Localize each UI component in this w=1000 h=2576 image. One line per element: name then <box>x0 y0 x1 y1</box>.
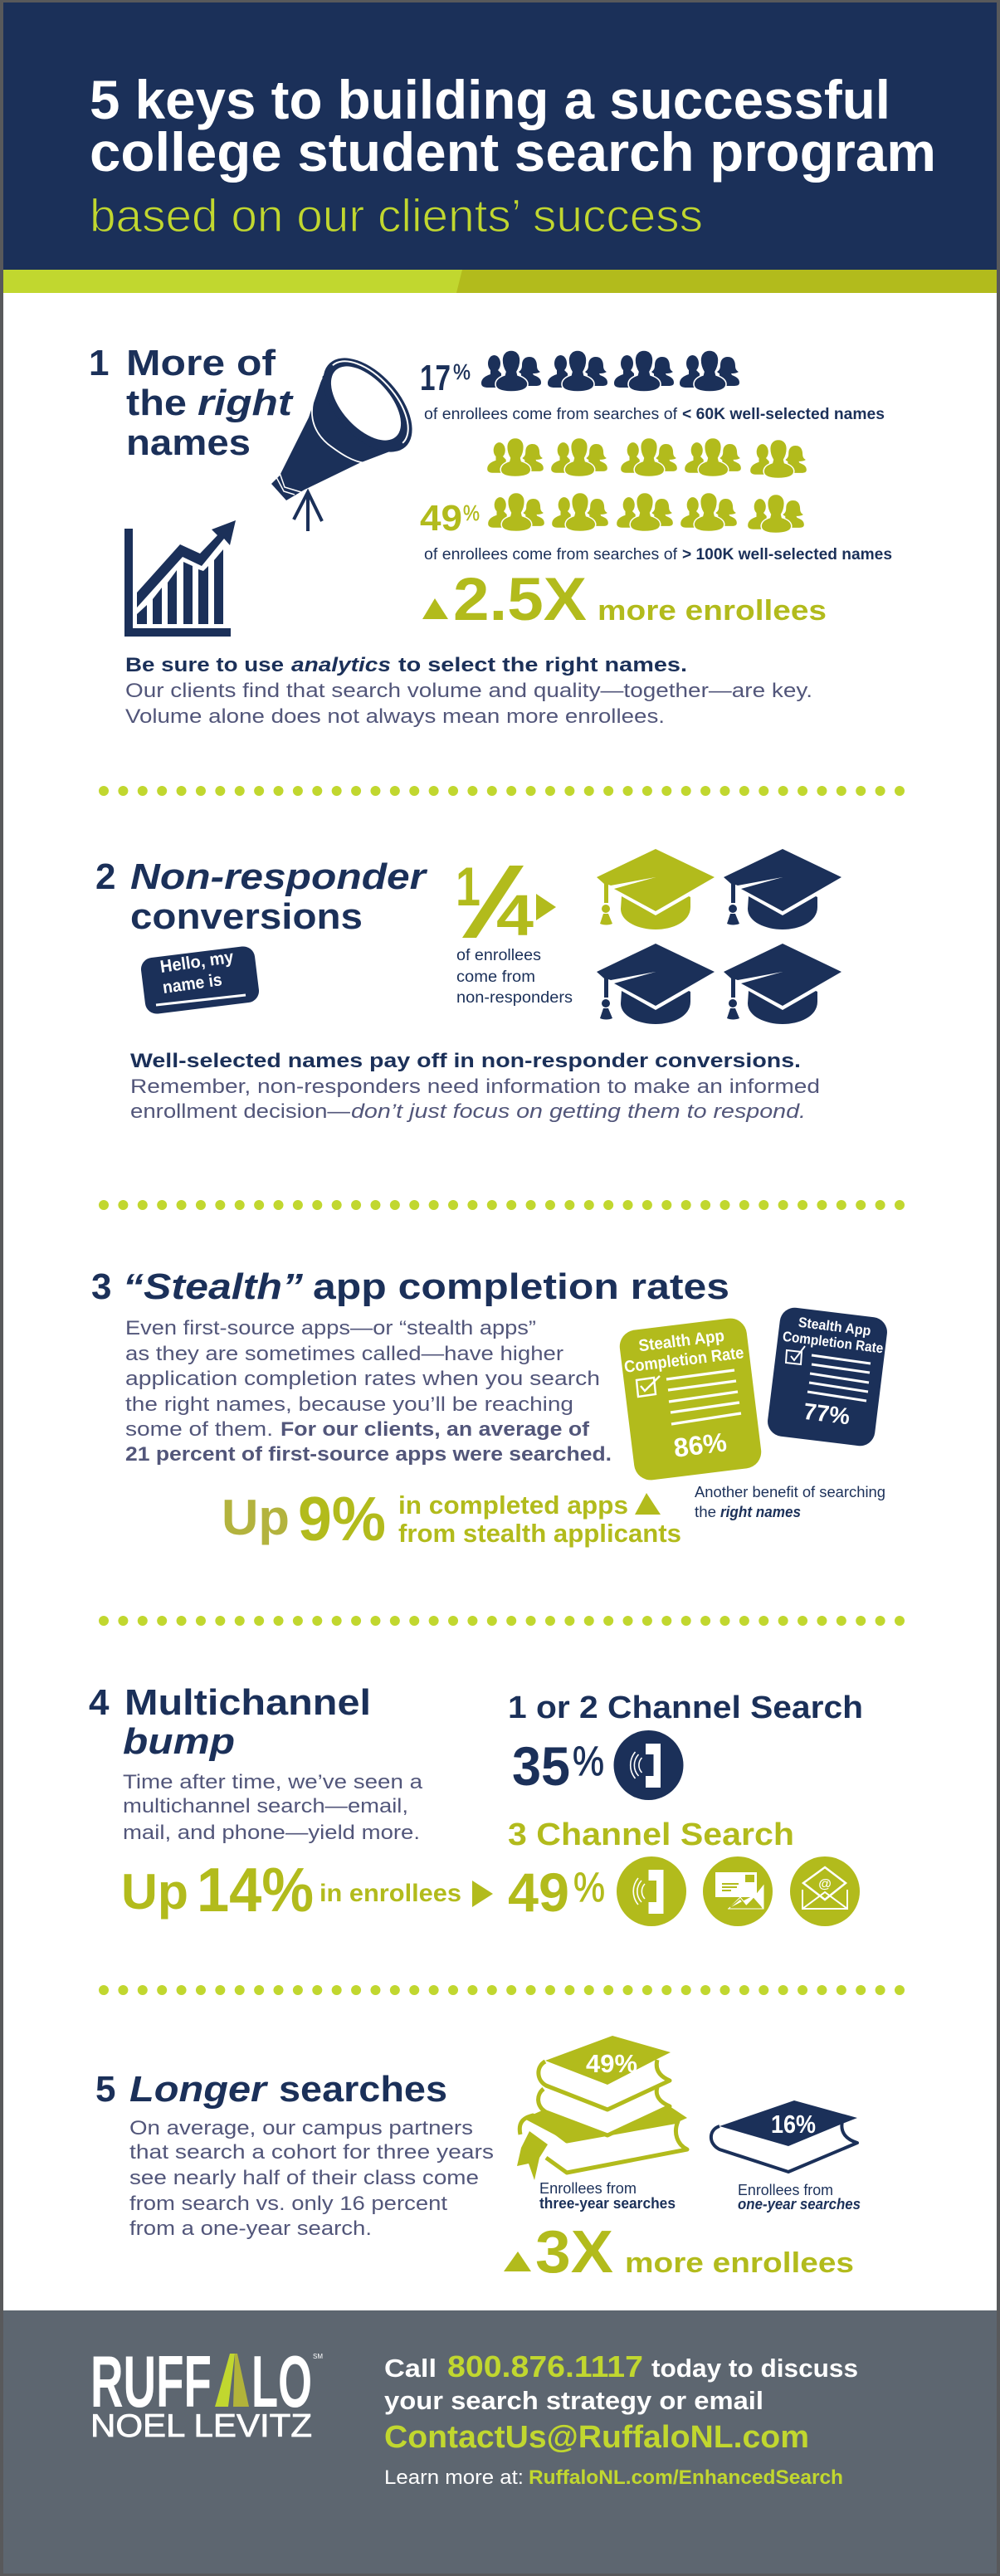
heading 4: Multichannel <box>124 1682 371 1723</box>
stat: up 9 percent: Up <box>222 1490 290 1545</box>
stat: 2.5X more enrollees: 2.5X <box>453 566 587 633</box>
heading 1 <box>89 343 295 463</box>
heading 4: 4 <box>89 1682 110 1723</box>
stat: up 9 percent: from stealth applicants <box>398 1519 681 1548</box>
call to action: 800.876.1117 <box>447 2349 643 2383</box>
caption: another benefit: the <box>695 1504 716 1520</box>
section 1: more of the right names <box>89 342 892 728</box>
stat: one quarter <box>456 856 556 948</box>
icon row: navy people <box>481 350 739 392</box>
caption: under 60K: of enrollees come from searches of <box>424 406 678 423</box>
heading 5: 5 <box>95 2069 115 2110</box>
title: college student search program <box>90 121 936 183</box>
caption: of enrollees from non-responders <box>456 947 573 1007</box>
caption: one-year searches: one-year searches <box>738 2196 861 2213</box>
call to action: ContactUs@RuffaloNL.com <box>384 2420 809 2455</box>
card: navy 77 percent: 77% <box>802 1398 851 1429</box>
title: 5 keys to building a successful <box>90 69 890 130</box>
heading 2: conversions <box>130 896 363 937</box>
heading 1: the <box>126 383 187 423</box>
text block: on average: On average, our campus partners <box>129 2117 473 2139</box>
stat: 35 percent: % <box>573 1738 604 1784</box>
caption: another benefit <box>695 1484 885 1520</box>
section 5: longer searches <box>95 2036 861 2286</box>
icon: phone navy <box>614 1730 684 1800</box>
caption: under 60K <box>424 406 885 423</box>
text block: first-source apps: For our clients, an average of <box>280 1418 590 1441</box>
heading 4: bump <box>123 1721 235 1762</box>
card: navy 77 percent <box>766 1306 889 1447</box>
call to action: Call <box>384 2354 437 2383</box>
text block: first-source apps: 21 percent of first-source apps were searched. <box>125 1443 612 1466</box>
card: lime 86 percent: Stealth App <box>637 1327 725 1355</box>
text block: time after time: Time after time, we’ve seen a <box>123 1771 423 1793</box>
icon row: lime people 1 <box>487 438 807 478</box>
stat: up 14 percent: 14% <box>197 1855 314 1925</box>
icon: email at sign <box>790 1856 860 1926</box>
caption: another benefit: right names <box>720 1504 801 1520</box>
logo: Ruffalo Noel Levitz: RUFF <box>90 2340 212 2422</box>
stat: up 9 percent: 9% <box>298 1484 386 1554</box>
caption: three-year searches <box>539 2180 676 2212</box>
icon: bar chart with rising arrow <box>124 520 236 637</box>
icon: letter mail <box>703 1856 773 1926</box>
call to action: RuffaloNL.com/EnhancedSearch <box>529 2466 843 2489</box>
stat: up 9 percent <box>222 1484 681 1554</box>
header panel <box>3 2 997 270</box>
stat: 3X more enrollees: more enrollees <box>625 2247 854 2279</box>
text block: well-selected names: enrollment decision— <box>130 1100 350 1123</box>
text block: analytics: analytics <box>291 654 391 676</box>
stat: up 14 percent: Up <box>121 1864 188 1920</box>
text block: first-source apps: as they are sometimes called—have higher <box>125 1343 563 1365</box>
caption: of enrollees from non-responders: come from <box>456 968 535 986</box>
heading 1: 1 <box>89 343 109 383</box>
call to action: Learn more at: <box>384 2466 524 2489</box>
caption: over 100K <box>424 546 892 564</box>
call to action: your search strategy or email <box>384 2386 763 2415</box>
stat: 3X more enrollees <box>504 2219 854 2286</box>
lime accent band <box>3 270 997 293</box>
call to action: today to discuss <box>651 2354 858 2383</box>
stat: up 9 percent: in completed apps <box>398 1490 628 1520</box>
heading 1: right <box>198 383 295 423</box>
caption: over 100K: of enrollees come from searches of <box>424 546 678 564</box>
text block: first-source apps: Even first-source apps—or “stealth apps” <box>125 1317 536 1339</box>
text block: on average: that search a cohort for three years <box>129 2141 494 2164</box>
text block: time after time: mail, and phone—yield more. <box>123 1822 420 1844</box>
text block: on average: from search vs. only 16 percent <box>129 2193 447 2215</box>
card: lime 86 percent <box>617 1316 763 1482</box>
icon: name tag <box>139 945 261 1015</box>
stat: one quarter: 1 <box>456 856 480 917</box>
heading 1: names <box>126 422 251 463</box>
label: 49 percent: 49% <box>586 2049 637 2078</box>
icon: single book <box>711 2100 857 2172</box>
stat: 17%: 17 <box>420 358 451 398</box>
card: navy 77 percent: Completion Rate <box>782 1329 884 1356</box>
stat: 17%: % <box>453 359 471 384</box>
stat: 2.5X more enrollees: more enrollees <box>598 595 827 627</box>
stat: 49 percent <box>508 1861 605 1923</box>
card: navy 77 percent: Stealth App <box>798 1315 872 1339</box>
stat: 49 percent: % <box>573 1864 605 1910</box>
stat: 35 percent: 35 <box>512 1735 570 1797</box>
text block: first-source apps: application completion rates when you search <box>125 1368 600 1390</box>
icon: megaphone <box>271 342 429 500</box>
heading 5: Longer <box>129 2069 269 2110</box>
text block: well-selected names: don’t just focus on getting them to respond. <box>351 1100 806 1123</box>
caption: another benefit: Another benefit of searching <box>695 1484 885 1500</box>
caption: under 60K: < 60K well-selected names <box>682 406 885 423</box>
heading: 1 or 2 channel search: 1 or 2 Channel Search <box>508 1690 863 1725</box>
text block: first-source apps: some of them. <box>125 1418 273 1441</box>
text block: well-selected names <box>130 1050 820 1123</box>
heading 4 <box>89 1682 371 1762</box>
text block: on average <box>129 2117 494 2240</box>
caption: of enrollees from non-responders: of enrollees <box>456 947 541 964</box>
heading 5 <box>95 2069 447 2110</box>
white content panel <box>3 293 997 2311</box>
icon row: lime people 2 <box>488 493 804 533</box>
logo: Ruffalo Noel Levitz: LO <box>251 2340 312 2422</box>
stat: up 14 percent: in enrollees <box>320 1880 461 1907</box>
caption: three-year searches: three-year searches <box>539 2195 676 2212</box>
text block: well-selected names: Well-selected names pay off in non-responder conversions. <box>130 1050 801 1072</box>
section 4: multichannel bump <box>89 1682 863 1926</box>
stat: 3X more enrollees: 3X <box>535 2219 613 2286</box>
heading 2 <box>95 856 428 937</box>
text block: analytics <box>125 654 812 728</box>
card: lime 86 percent: 86% <box>672 1427 729 1463</box>
text block: analytics: to select the right names. <box>398 654 687 676</box>
icon: name tag: name is <box>161 970 223 998</box>
call to action <box>384 2349 858 2489</box>
label: 16 percent: 16% <box>771 2110 816 2139</box>
heading 3 <box>91 1266 729 1307</box>
subtitle: based on our clients’ success <box>90 189 703 242</box>
icon: email at sign: @ <box>818 1877 832 1891</box>
heading 5: searches <box>279 2069 447 2110</box>
footer panel <box>3 2310 997 2574</box>
heading 1: More of <box>126 343 276 383</box>
section 2: non-responder conversions <box>95 849 841 1123</box>
stat: up 14 percent <box>121 1855 493 1925</box>
icon: phone lime <box>617 1856 686 1926</box>
text block: analytics: Our clients find that search volume and quality—together—are key. <box>125 680 812 702</box>
text block: first-source apps <box>125 1317 612 1466</box>
heading 3: 3 <box>91 1266 111 1307</box>
icon: stack of three books <box>517 2036 687 2180</box>
caption: one-year searches: Enrollees from <box>738 2182 833 2198</box>
stat: one quarter: 4 <box>496 883 534 948</box>
icon: up arrow <box>294 492 322 531</box>
text block: analytics: Volume alone does not always mean more enrollees. <box>125 705 665 728</box>
text block: time after time: multichannel search—email, <box>123 1795 408 1817</box>
caption: three-year searches: Enrollees from <box>539 2180 637 2197</box>
stat: 2.5X more enrollees <box>422 566 827 633</box>
caption: one-year searches <box>738 2182 861 2213</box>
text block: on average: see nearly half of their class come <box>129 2167 479 2189</box>
icons: graduation caps <box>597 849 841 1024</box>
stat: 49%: 49 <box>420 498 462 539</box>
stat: 49%: % <box>463 500 480 525</box>
logo: Ruffalo Noel Levitz: NOEL LEVITZ <box>90 2408 312 2444</box>
heading: 3 channel search: 3 Channel Search <box>508 1817 794 1852</box>
caption: of enrollees from non-responders: non-responders <box>456 989 573 1007</box>
text block: on average: from a one-year search. <box>129 2217 372 2240</box>
title <box>90 69 936 183</box>
text block: time after time <box>123 1771 423 1844</box>
caption: over 100K: > 100K well-selected names <box>682 546 892 564</box>
logo: Ruffalo Noel Levitz: SM <box>313 2353 323 2360</box>
text block: well-selected names: Remember, non-responders need information to make an informed <box>130 1076 820 1098</box>
card: lime 86 percent: Completion Rate <box>623 1344 745 1377</box>
heading 3: app completion rates <box>313 1266 729 1307</box>
heading 2: 2 <box>95 856 115 897</box>
icon: name tag: Hello, my <box>159 948 235 977</box>
stat: 49% <box>420 498 480 539</box>
section 3: stealth app completion rates <box>91 1266 889 1554</box>
text block: analytics: Be sure to use <box>125 654 284 676</box>
heading 3: “Stealth” <box>123 1266 303 1307</box>
text block: first-source apps: the right names, because you’ll be reaching <box>125 1393 573 1416</box>
stat: 35 percent <box>512 1735 604 1797</box>
logo: Ruffalo Noel Levitz <box>90 2340 323 2444</box>
heading 2: Non-responder <box>130 856 428 897</box>
stat: 49 percent: 49 <box>508 1861 569 1923</box>
